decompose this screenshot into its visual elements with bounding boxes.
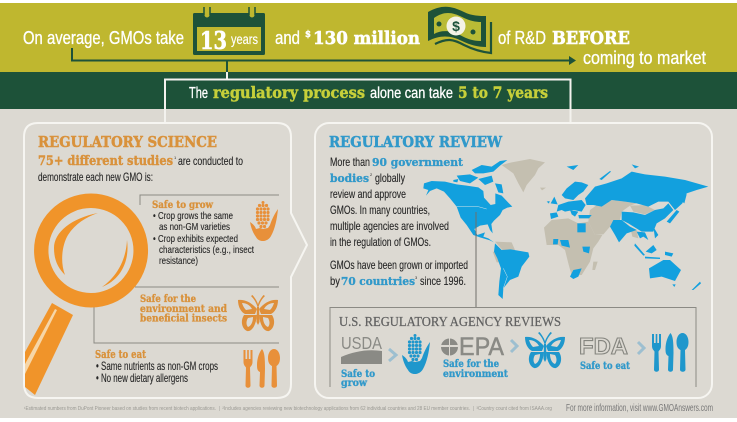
text: studies intro: [38, 154, 243, 184]
text: government bodies: in the regulation of GMOs.: [330, 235, 431, 249]
icon: butterfly blue: [525, 332, 565, 368]
icon: cutlery: [244, 349, 280, 388]
logo: USDA: USDA: [341, 333, 382, 353]
icon: calendar: 13: [200, 26, 227, 55]
text: 70 countries: since 1996.: [420, 274, 466, 288]
text: of R&D before: of R&D: [498, 28, 546, 48]
icon: calendar: [193, 7, 265, 55]
icon: calendar: years: [231, 31, 258, 47]
text: safe to grow: [341, 369, 375, 389]
heading: agency reviews: U.S. REGULATORY AGENCY REVIEWS: [339, 315, 561, 330]
text: the regulatory process: alone can take: [370, 85, 453, 102]
heading: regulatory science: REGULATORY SCIENCE: [38, 133, 217, 151]
arrow: [638, 342, 644, 354]
text: government bodies: review and approve: [330, 187, 406, 201]
icon: corn blue: [402, 334, 430, 374]
text: safe to grow: grow: [341, 378, 367, 389]
banner: time and cost: [0, 3, 737, 72]
text: and 130 million: and: [275, 28, 300, 48]
logo: EPA: EPA: [459, 333, 504, 361]
block: safe to grow: [152, 200, 254, 267]
text: and 130 million: 130 million: [313, 28, 420, 49]
block: safe for the environment: [140, 294, 227, 324]
text: studies intro: demonstrate each new GMO is:: [38, 170, 153, 184]
text: studies intro: are conducted to: [178, 154, 243, 168]
panel: regulatory science: [24, 123, 307, 398]
panel: regulatory review: [315, 123, 712, 398]
text: 70 countries: by: [330, 274, 340, 288]
box: U.S. regulatory agency reviews: [330, 308, 696, 389]
text: safe for the environment: Safe for the: [443, 359, 499, 370]
block: safe to eat: • Same nutrients as non-GM crops: [96, 359, 218, 373]
map: Americas: [423, 159, 546, 299]
text: studies intro: 1: [174, 155, 177, 160]
icon: corn: [250, 201, 278, 241]
arrow: [389, 349, 396, 361]
text: 70 countries: 3: [415, 275, 418, 280]
icon: magnifying glass: [25, 193, 148, 395]
text: government bodies: 2: [370, 172, 373, 177]
block: safe to grow: characteristics (e.g., insect: [159, 244, 254, 256]
logo: EPA: [440, 333, 504, 361]
block: safe to eat: Safe to eat: [95, 348, 147, 361]
block: safe for the environment: environment and: [140, 304, 227, 315]
text: of R&D before: [498, 28, 630, 49]
logo: USDA: [341, 333, 382, 364]
text: government bodies: 90 government: [372, 155, 464, 169]
block: safe to eat: [95, 348, 218, 385]
block: safe to grow: • Crop exhibits expected: [153, 233, 238, 245]
block: safe to grow: Safe to grow: [152, 200, 213, 211]
text: coming to market: coming to market: [583, 48, 706, 68]
text: government bodies: bodies: [330, 171, 369, 185]
block: safe to grow: • Crop grows the same: [153, 210, 233, 222]
icon: money: $: [452, 18, 460, 34]
text: 70 countries: 70 countries: [341, 274, 415, 288]
text: on average: On average, GMOs take: [23, 28, 184, 48]
logo: FDA: FDA: [579, 333, 628, 359]
text: government bodies: GMOs. In many countries,: [330, 203, 430, 217]
text: 70 countries: GMOs have been grown or imported: [330, 258, 468, 272]
footnotes: ¹Estimated numbers from DuPont Pioneer based on studies from recent biotech applications. | ²Includes agencies reviewing new biotechnology applications from 62 individual countries and 28 EU member countries. | ³Country count cited from ISAAA.org: [24, 406, 552, 412]
text: safe for the environment: [443, 359, 508, 380]
text: the regulatory process: [189, 83, 548, 102]
text: safe to eat: Safe to eat: [580, 361, 630, 372]
icon: cutlery blue: [652, 333, 688, 372]
text: safe to grow: Safe to: [341, 369, 375, 380]
block: safe for the environment: Safe for the: [140, 294, 196, 305]
icon: butterfly: [238, 295, 278, 331]
block: safe to grow: as non-GM varieties: [159, 221, 230, 233]
text: the regulatory process: 5 to 7 years: [458, 83, 548, 102]
text: government bodies: multiple agencies are involved: [330, 219, 449, 233]
heading: regulatory review: REGULATORY REVIEW: [329, 133, 503, 151]
text: and 130 million: $: [305, 30, 311, 40]
map: Eurasia, Africa, Oceania: [544, 164, 708, 290]
icon: money: [428, 7, 491, 53]
text: government bodies: [330, 155, 464, 249]
timeline arrow: [72, 48, 576, 72]
text: the regulatory process: The: [189, 85, 208, 102]
band: regulatory process: [0, 72, 737, 123]
arrow: [511, 340, 517, 352]
text: government bodies: globally: [375, 171, 405, 185]
text: government bodies: More than: [330, 155, 370, 169]
text: of R&D before: BEFORE: [552, 28, 630, 49]
world map: [423, 159, 708, 299]
connector line: [475, 212, 477, 307]
block: safe to eat: • No new dietary allergens: [96, 371, 188, 385]
text: safe for the environment: environment: [443, 369, 508, 380]
text: 70 countries: [330, 258, 468, 288]
text: studies intro: 75+ different studies: [38, 154, 173, 169]
text: and 130 million: [275, 28, 420, 49]
block: safe to grow: resistance): [159, 255, 198, 267]
text: the regulatory process: regulatory process: [213, 83, 365, 102]
block: safe for the environment: beneficial insects: [140, 314, 227, 324]
